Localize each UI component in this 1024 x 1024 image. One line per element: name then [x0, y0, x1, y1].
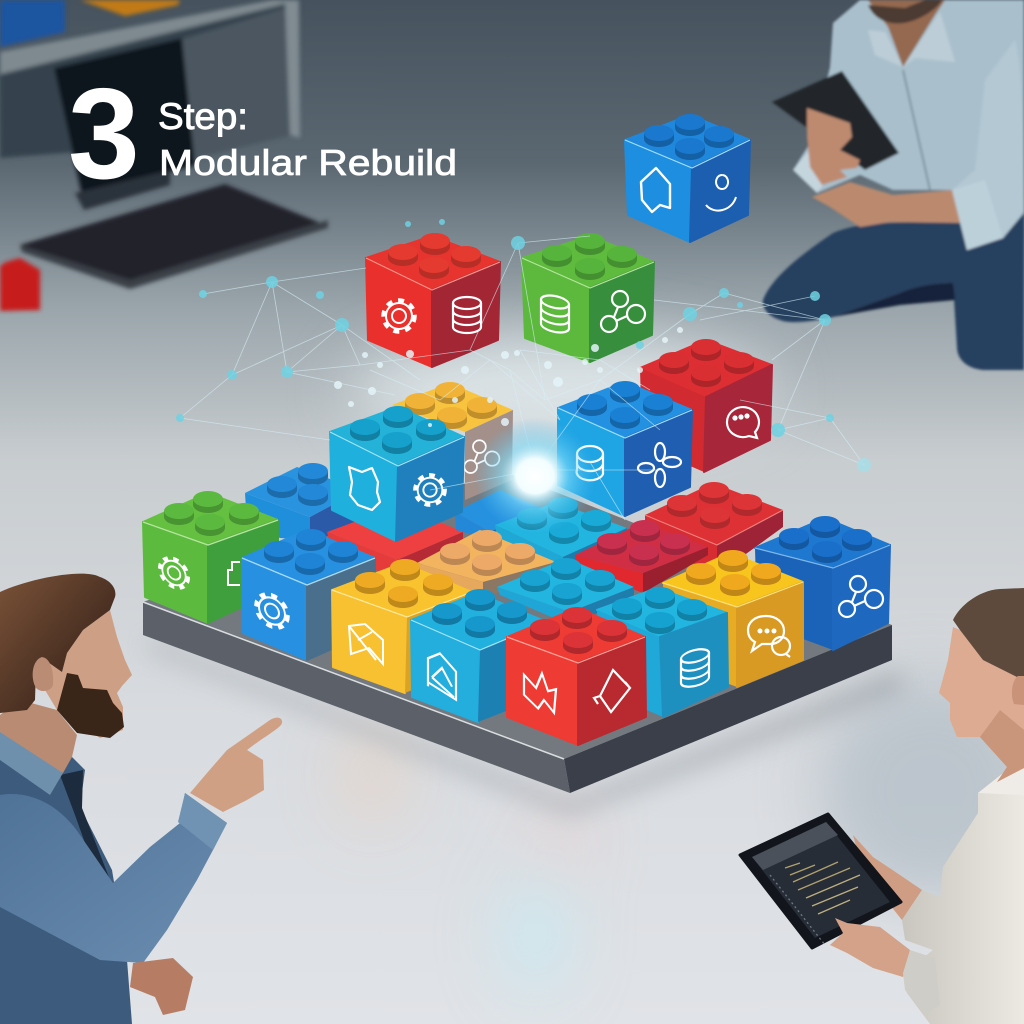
- icon: nodes: [464, 440, 499, 473]
- neck: [0, 700, 77, 773]
- icon: diamond link: [594, 670, 630, 712]
- back hand: [853, 835, 922, 920]
- icon: map fold: [349, 624, 383, 664]
- title block: [68, 62, 457, 206]
- hair: [953, 588, 1024, 680]
- neck and face: [939, 627, 1024, 782]
- brick: blue floating top: [625, 114, 750, 242]
- icon: chat: [727, 407, 759, 438]
- brick: blue centre small: [455, 490, 542, 540]
- blurred workspace: shelf and monitor: [0, 0, 328, 311]
- tablet: [740, 814, 901, 948]
- sleeve cuff: [903, 950, 940, 1015]
- person: top right man with tablet: [763, 0, 1024, 370]
- brick: red right floating: [640, 339, 772, 472]
- icon: person: [706, 175, 736, 211]
- brick: teal floating large: [330, 406, 464, 541]
- person: left man pointing: [0, 574, 282, 1024]
- step label: Step:: [158, 96, 248, 137]
- icon: nodes: [839, 576, 883, 617]
- icon: house chat: [641, 168, 670, 212]
- ear: [1012, 676, 1024, 705]
- icon: shield blob: [349, 467, 380, 510]
- hair: [0, 574, 115, 713]
- tablet code lines: [770, 862, 860, 945]
- icon: database: [453, 297, 481, 333]
- floor colour reflections: [340, 335, 1024, 995]
- platform shadow: [150, 640, 905, 815]
- brick: teal right: [597, 587, 728, 717]
- brick: blue back left: [245, 463, 360, 540]
- torso: [0, 732, 132, 1024]
- brick: red front: [507, 607, 646, 745]
- brick: red flat behind teal: [327, 505, 463, 577]
- brick: red flat centre: [575, 520, 708, 593]
- brick: blue front left: [242, 529, 375, 660]
- brick: green left: [143, 491, 278, 623]
- front hand: [830, 918, 910, 977]
- icon: database: [681, 647, 709, 689]
- icon: database: [541, 294, 569, 334]
- sleeve: [0, 793, 227, 963]
- collar: [0, 732, 63, 795]
- lower fist: [130, 958, 193, 1015]
- brick: yellow front: [332, 559, 472, 693]
- icon: chat bubbles: [748, 616, 790, 657]
- brick: blue centre floating: [558, 381, 692, 516]
- brick: red back right: [645, 482, 783, 575]
- brick: teal flat front: [497, 558, 634, 625]
- brick: yellow right: [663, 550, 803, 687]
- person: right woman with tablet: [740, 588, 1024, 1024]
- brick: blue far right: [755, 516, 890, 650]
- icon: gear: [415, 475, 445, 505]
- icon: gear: [160, 555, 188, 591]
- pointing hand: [190, 718, 282, 812]
- brick: yellow translucent floating: [392, 382, 513, 500]
- icon: partial module: [228, 562, 240, 585]
- icon: flower: [638, 443, 681, 487]
- platform: [143, 470, 892, 793]
- brick: red floating top: [366, 233, 500, 367]
- beard: [57, 673, 124, 738]
- icon: house: [428, 650, 456, 700]
- icon: database: [577, 446, 603, 480]
- brick: yellow flat: [417, 530, 556, 597]
- blouse: [902, 767, 1024, 1024]
- central light glow: [473, 418, 597, 534]
- brick: teal back flat: [495, 497, 627, 573]
- step number: 3: [68, 62, 140, 206]
- icon: gear: [256, 590, 288, 632]
- network of data points: [176, 219, 871, 520]
- icon: wave mark: [524, 669, 556, 713]
- title text: Modular Rebuild: [159, 142, 457, 183]
- icon: nodes: [601, 291, 645, 332]
- icon: gear: [384, 300, 414, 332]
- brick: green floating top: [522, 233, 654, 362]
- face: [45, 610, 132, 738]
- brick: teal front: [411, 589, 547, 722]
- ear: [33, 657, 53, 691]
